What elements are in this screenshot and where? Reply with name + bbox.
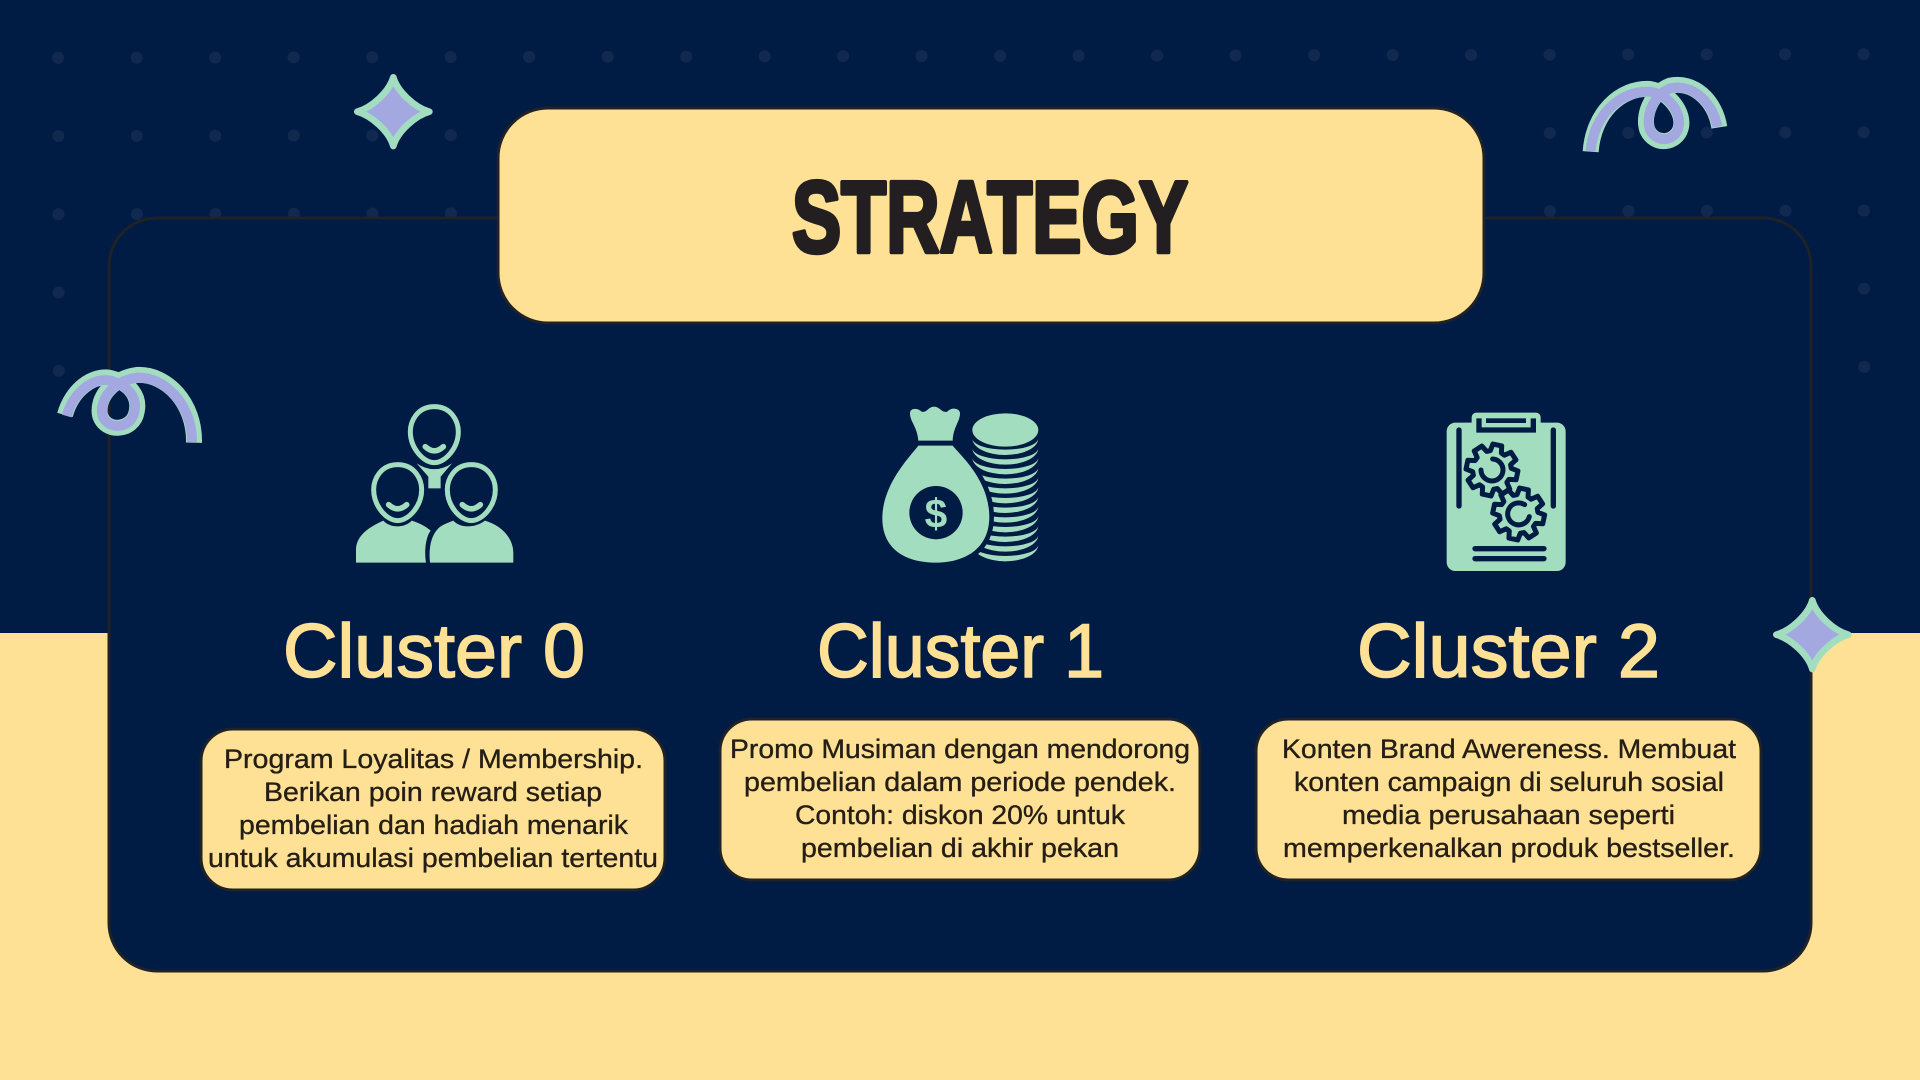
bottom yellow band — [0, 633, 1920, 1080]
card: Cluster 2 strategy — [1256, 719, 1761, 880]
card: Cluster 0 strategy: Program Loyalitas / Membership. — [224, 744, 643, 774]
card: Cluster 1 strategy: Promo Musiman dengan mendorong — [730, 734, 1190, 764]
decorative star top left — [357, 77, 429, 146]
heading: Cluster 0: Cluster 0 — [283, 609, 585, 694]
icon: people group — [356, 407, 513, 563]
main navy panel — [109, 218, 1811, 971]
icon: money bag and coins — [882, 407, 1038, 563]
title text: STRATEGY — [792, 162, 1188, 274]
heading: Cluster 1: Cluster 1 — [817, 609, 1104, 694]
card: Cluster 2 strategy: media perusahaan seperti — [1342, 800, 1675, 830]
card: Cluster 2 strategy: konten campaign di seluruh sosial — [1294, 767, 1724, 797]
decorative swirl left — [65, 375, 194, 443]
title banner — [498, 108, 1484, 323]
card: Cluster 1 strategy: pembelian di akhir pekan — [801, 833, 1119, 863]
card: Cluster 2 strategy: memperkenalkan produk bestseller. — [1283, 833, 1735, 863]
icon: clipboard with gears — [1447, 413, 1566, 571]
card: Cluster 0 strategy: untuk akumulasi pembelian tertentu — [208, 843, 658, 873]
card: Cluster 0 strategy: Berikan poin reward setiap — [264, 777, 602, 807]
card: Cluster 2 strategy: Konten Brand Awereness. Membuat — [1282, 734, 1737, 764]
heading: Cluster 2: Cluster 2 — [1357, 609, 1660, 694]
card: Cluster 1 strategy: pembelian dalam periode pendek. — [744, 767, 1176, 797]
card: Cluster 1 strategy: Contoh: diskon 20% untuk — [795, 800, 1126, 830]
decorative star right — [1776, 600, 1848, 669]
card: Cluster 0 strategy: pembelian dan hadiah menarik — [239, 810, 629, 840]
decorative swirl top right — [1591, 85, 1719, 152]
card: Cluster 1 strategy — [720, 719, 1200, 880]
card: Cluster 0 strategy — [201, 729, 665, 890]
icon: money bag and coins: $ — [925, 490, 948, 536]
